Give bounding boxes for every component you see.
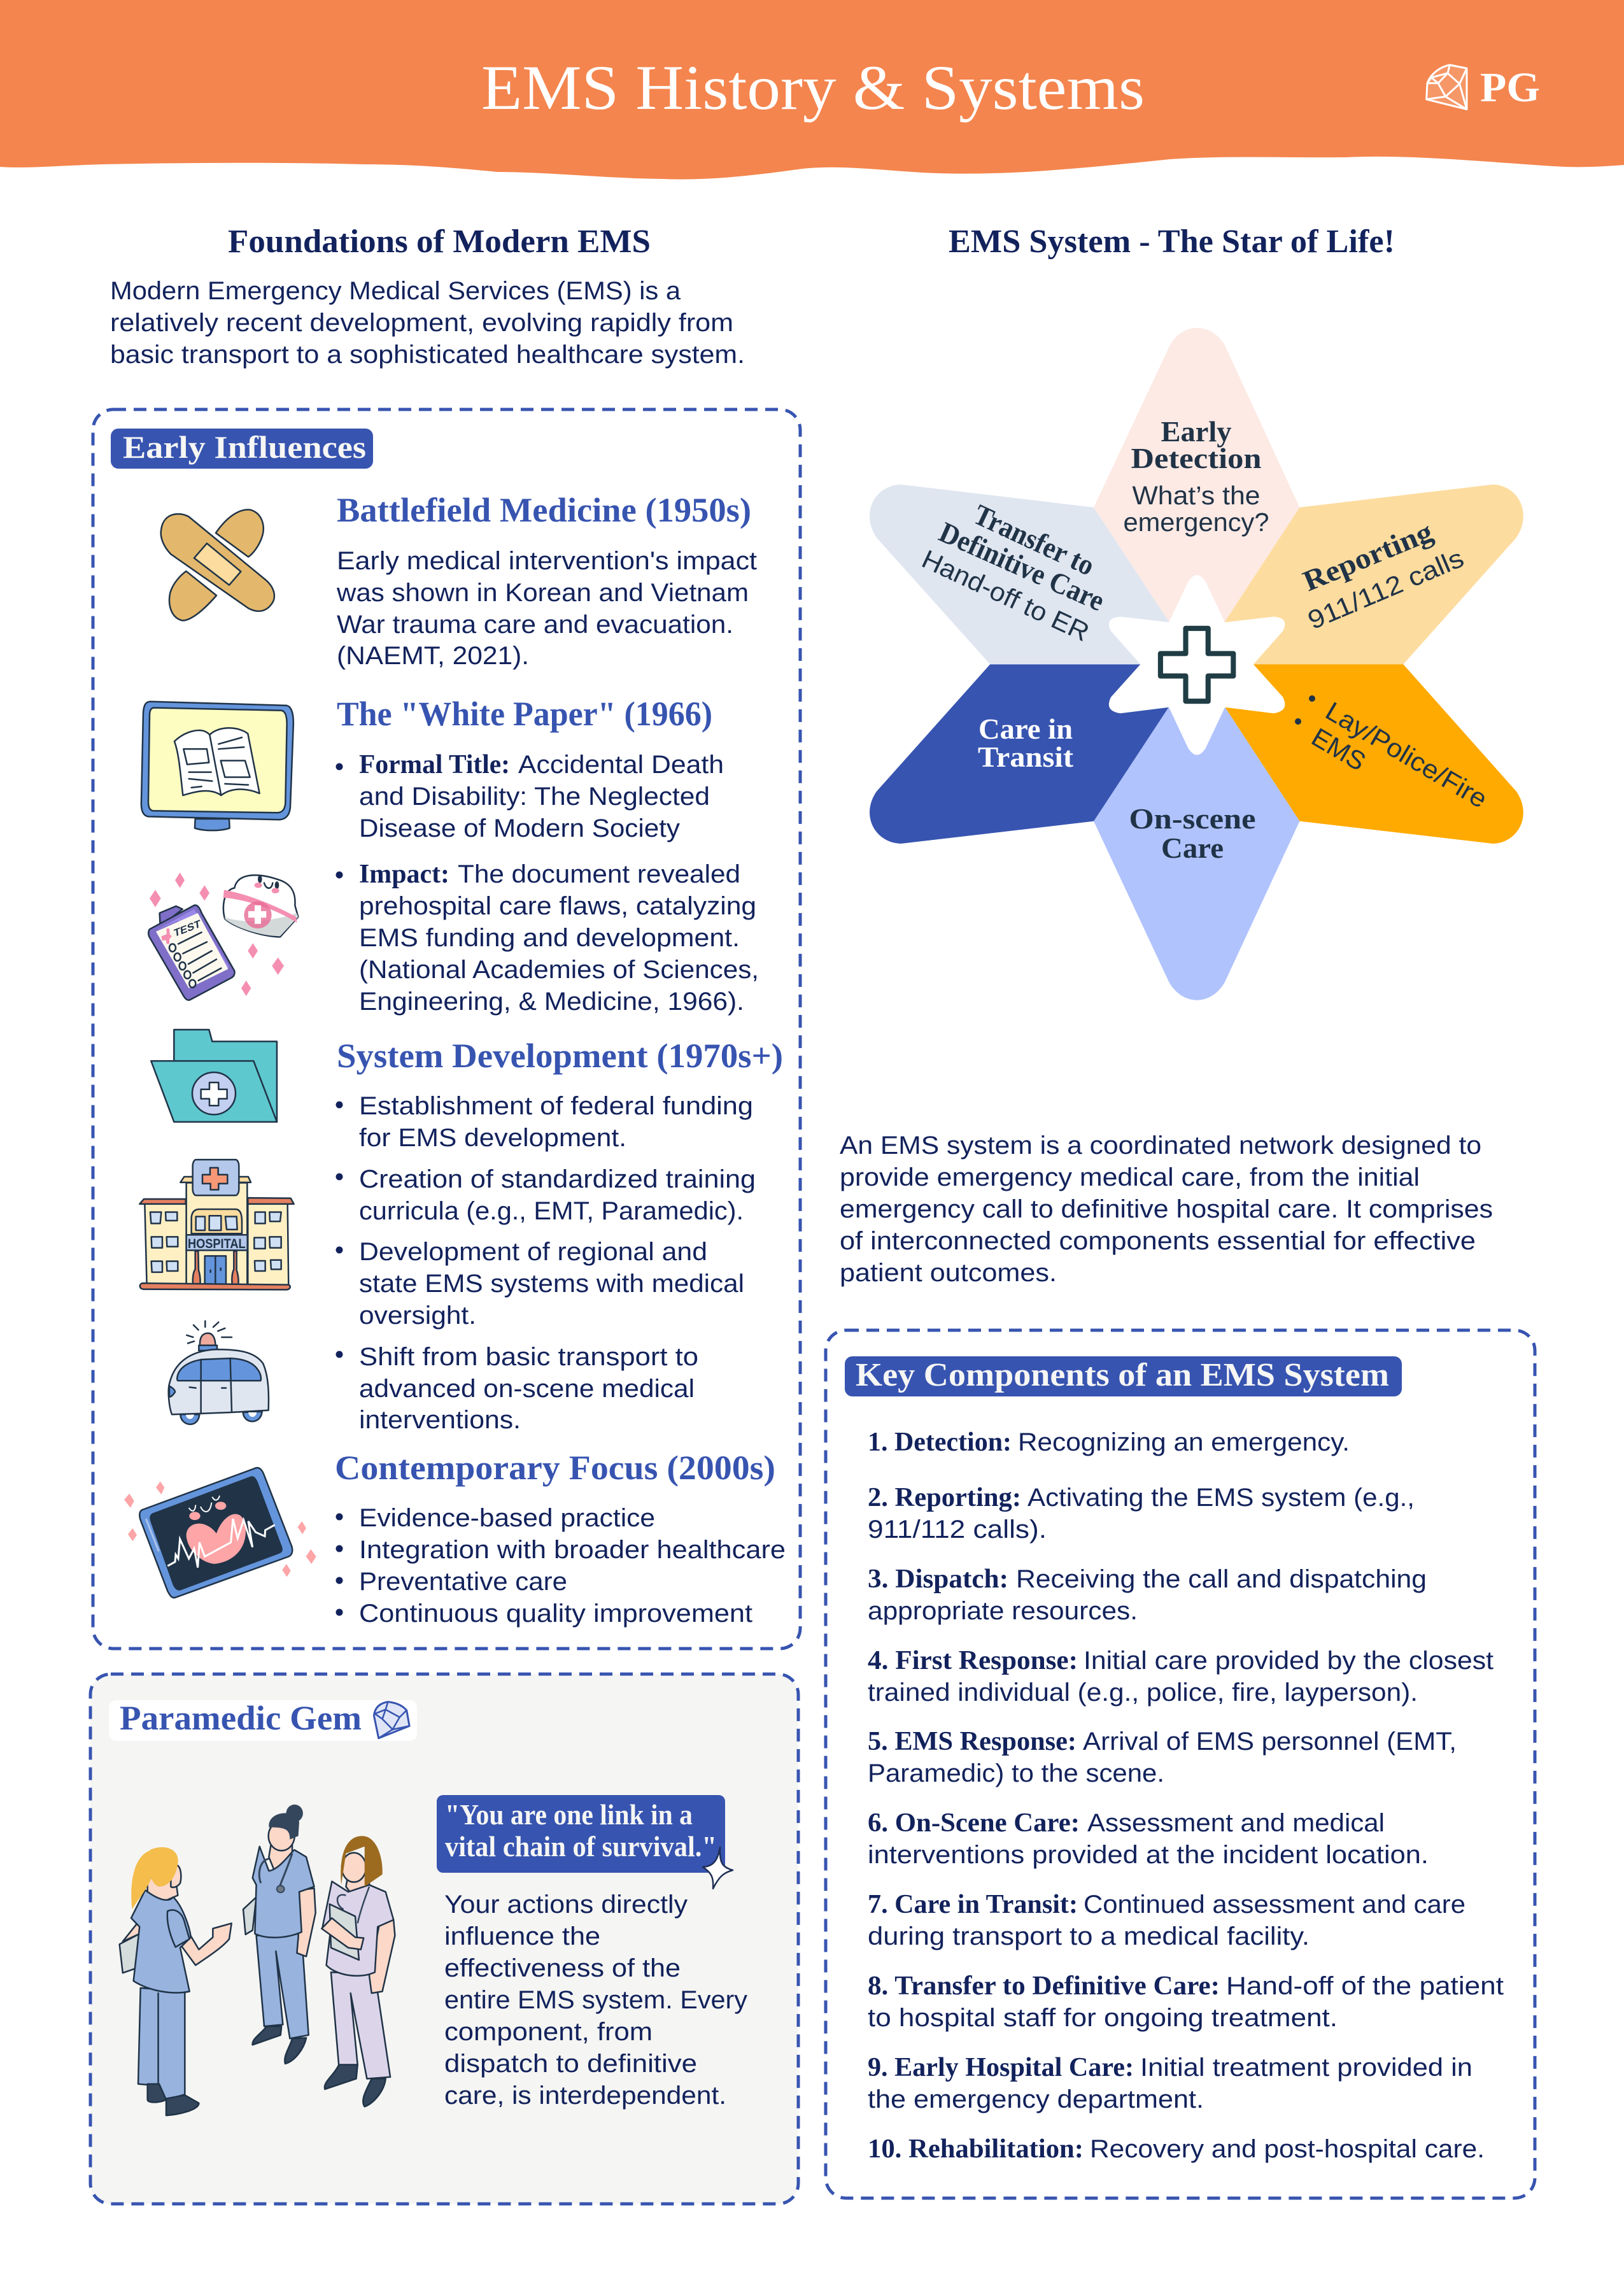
diagram: star of life <box>870 328 1523 1000</box>
text block: gem message: Your actions directly <box>444 1891 688 1919</box>
section: The White Paper: Formal Title: <box>359 750 510 779</box>
icon: tablet with heart <box>124 1468 316 1598</box>
icon: ambulance <box>169 1321 269 1424</box>
section: The White Paper: The document revealed <box>458 860 740 888</box>
icon: clipboard and nurse cap <box>148 872 298 1000</box>
list item 9: 9. Early Hospital Care: <box>868 2053 1134 2082</box>
list item 10: 10. Rehabilitation: <box>868 2134 1084 2164</box>
section: The White Paper: Impact: <box>359 860 449 889</box>
heading: Foundations of Modern EMS: Foundations of Modern EMS <box>228 224 651 260</box>
header banner <box>0 0 1624 180</box>
star centre <box>1109 575 1285 755</box>
section: Battlefield Medicine <box>336 491 757 670</box>
section: System Development: advanced on-scene medical <box>359 1375 695 1403</box>
section: The White Paper: Disease of Modern Society <box>359 814 680 842</box>
section: The White Paper: (National Academies of Sciences, <box>359 956 759 984</box>
text block: gem message: influence the <box>444 1922 600 1950</box>
petal: transfer to definitive care <box>870 485 1197 664</box>
section: Contemporary Focus: Integration with broader healthcare <box>359 1536 786 1564</box>
intro text: Modern Emergency Medical Services (EMS) is a <box>110 277 681 305</box>
section: The White Paper: prehospital care flaws, catalyzing <box>359 892 756 920</box>
text block: gem message: entire EMS system. Every <box>444 1986 747 2014</box>
label: Early Detection: emergency? <box>1123 508 1269 537</box>
label: Care in Transit <box>978 713 1074 773</box>
list item 6: 6. On-Scene Care: <box>868 1808 1080 1838</box>
section: System Development <box>336 1037 783 1434</box>
section: Battlefield Medicine: Early medical intervention's impact <box>337 547 757 575</box>
list item 5: Arrival of EMS personnel (EMT, <box>1083 1728 1457 1756</box>
section: The White Paper: EMS funding and development. <box>359 924 740 952</box>
section: Contemporary Focus: Contemporary Focus (2000s) <box>335 1449 775 1487</box>
label: Early Detection <box>1123 415 1269 537</box>
list item 2: 2. Reporting: <box>868 1483 1021 1512</box>
list item 3: appropriate resources. <box>868 1597 1138 1625</box>
icon: cross <box>1161 628 1233 701</box>
list item 8 <box>868 1971 1504 2032</box>
list item 7: during transport to a medical facility. <box>868 1922 1310 1950</box>
text block: EMS system description: An EMS system is a coordinated network designed to <box>840 1132 1481 1160</box>
figure: nurse with brown hair <box>321 1836 395 2106</box>
list item 6: interventions provided at the incident location. <box>868 1841 1429 1869</box>
list item 2: 911/112 calls). <box>868 1516 1047 1544</box>
logo: gem and PG <box>1427 64 1540 111</box>
icon: bandage <box>161 509 274 621</box>
section: Contemporary Focus: Evidence-based practice <box>359 1504 655 1532</box>
callout: quote <box>437 1795 725 1873</box>
callout: quote: "You are one link in a <box>445 1798 693 1831</box>
petal: care in transit <box>870 664 1197 844</box>
section: System Development: oversight. <box>359 1302 476 1330</box>
list item 5 <box>868 1727 1457 1787</box>
list item 4: Initial care provided by the closest <box>1084 1647 1493 1675</box>
tag: Early Influences: Early Influences <box>123 429 366 465</box>
list item 7: Continued assessment and care <box>1084 1891 1465 1919</box>
list item 1: 1. Detection: <box>868 1428 1012 1457</box>
list item 1: Recognizing an emergency. <box>1018 1428 1350 1456</box>
list item 6: Assessment and medical <box>1087 1809 1385 1837</box>
panel: Paramedic Gem <box>90 1674 798 2204</box>
section: Battlefield Medicine: War trauma care and evacuation. <box>337 611 733 639</box>
label: Reporting <box>1298 515 1468 635</box>
label: On-scene Care <box>1129 802 1255 864</box>
list item 8: 8. Transfer to Definitive Care: <box>868 1971 1220 2001</box>
section: System Development: state EMS systems with medical <box>359 1270 744 1298</box>
list item 10: Recovery and post-hospital care. <box>1090 2135 1485 2163</box>
list item 4: trained individual (e.g., police, fire, layperson). <box>868 1679 1418 1707</box>
section: System Development: Establishment of federal funding <box>359 1092 753 1120</box>
list item 8: Hand-off of the patient <box>1226 1972 1504 2000</box>
label: Lay Police Fire EMS: Lay/Police/Fire <box>1320 696 1492 814</box>
list item 1 <box>868 1428 1350 1457</box>
panel: Early Influences <box>93 409 800 1649</box>
icon: hospital: HOSPITAL <box>188 1235 246 1251</box>
heading: EMS System - The Star of Life: EMS System - The Star of Life! <box>949 224 1395 260</box>
callout: quote: vital chain of survival." <box>445 1830 717 1863</box>
icon: clipboard and nurse cap: TEST <box>173 918 202 939</box>
list item 2: Activating the EMS system (e.g., <box>1027 1484 1415 1512</box>
list item 10 <box>868 2134 1485 2164</box>
title: EMS History & Systems <box>481 52 1145 123</box>
text block: gem message: effectiveness of the <box>444 1954 681 1982</box>
section: Contemporary Focus: Continuous quality improvement <box>359 1600 752 1628</box>
text block: EMS system description: of interconnected components essential for effective <box>840 1227 1476 1255</box>
section: The White Paper: The "White Paper" (1966) <box>337 695 712 733</box>
label: Transfer to Definitive Care <box>917 498 1110 647</box>
figure: nurse with blonde ponytail <box>120 1847 232 2115</box>
list item 5: 5. EMS Response: <box>868 1727 1077 1756</box>
label: Care in Transit: Care in <box>978 713 1073 745</box>
list item 9: Initial treatment provided in <box>1140 2054 1472 2082</box>
list item 3 <box>868 1565 1427 1625</box>
section: The White Paper: Accidental Death <box>518 751 724 779</box>
label: On-scene Care: Care <box>1161 832 1224 864</box>
petal: lay police fire <box>1197 664 1523 844</box>
section: Battlefield Medicine: Battlefield Medicine (1950s) <box>337 491 751 529</box>
list item 3: Receiving the call and dispatching <box>1016 1565 1427 1593</box>
list item 7 <box>868 1890 1465 1950</box>
intro text: relatively recent development, evolving rapidly from <box>110 309 733 337</box>
list item 4 <box>868 1646 1493 1707</box>
list item 3: 3. Dispatch: <box>868 1565 1008 1594</box>
section: The White Paper: and Disability: The Neglected <box>359 783 710 811</box>
tag: Paramedic Gem: Paramedic Gem <box>120 1699 362 1737</box>
icon: monitor with book <box>141 702 293 830</box>
panel: Key Components <box>826 1330 1535 2198</box>
label: Early Detection: Early <box>1161 415 1231 448</box>
label: Transfer to Definitive Care: Transfer to <box>969 498 1099 582</box>
petal: on-scene care <box>1094 664 1299 1000</box>
text block: EMS system description: provide emergency medical care, from the initial <box>840 1163 1420 1191</box>
label: On-scene Care: On-scene <box>1129 802 1255 835</box>
petal: early detection <box>1094 328 1299 664</box>
label: Reporting: Reporting <box>1298 515 1437 597</box>
label: Care in Transit: Transit <box>978 741 1074 773</box>
list item 2 <box>868 1483 1415 1544</box>
text block: EMS system description: patient outcomes. <box>840 1259 1057 1287</box>
list item 5: Paramedic) to the scene. <box>868 1759 1164 1787</box>
section: System Development: curricula (e.g., EMT, Paramedic). <box>359 1197 744 1225</box>
intro text <box>110 277 745 369</box>
label: Early Detection: Detection <box>1131 442 1262 474</box>
section: Battlefield Medicine: (NAEMT, 2021). <box>337 642 529 670</box>
illustration: three medical staff <box>120 1805 395 2115</box>
section: Contemporary Focus: Preventative care <box>359 1568 567 1596</box>
section: System Development: for EMS development. <box>359 1124 626 1152</box>
icon: medical folder <box>151 1030 277 1122</box>
tag: Key Components of an EMS System: Key Components of an EMS System <box>856 1357 1389 1393</box>
logo: gem and PG: PG <box>1480 64 1540 111</box>
text block: gem message <box>444 1891 747 2110</box>
section: System Development: Creation of standardized training <box>359 1165 756 1193</box>
icon: sparkle <box>703 1847 733 1889</box>
label: Lay Police Fire EMS: EMS <box>1306 722 1371 776</box>
label: Transfer to Definitive Care: Hand-off to ER <box>917 544 1094 647</box>
figure: nurse with dark bun <box>243 1805 316 2064</box>
label: Reporting: 911/112 calls <box>1304 543 1468 635</box>
intro text: basic transport to a sophisticated healthcare system. <box>110 341 745 369</box>
section: System Development: System Development (1970s+) <box>337 1037 783 1075</box>
list item 9: the emergency department. <box>868 2085 1204 2113</box>
label: Early Detection: What’s the <box>1132 481 1260 510</box>
text block: gem message: component, from <box>444 2018 653 2046</box>
text block: EMS system description <box>840 1132 1493 1287</box>
section: System Development: Development of regional and <box>359 1238 707 1266</box>
icon: gem <box>374 1702 409 1738</box>
list item 7: 7. Care in Transit: <box>868 1890 1078 1919</box>
petal: reporting <box>1197 485 1523 664</box>
list item 9 <box>868 2053 1472 2113</box>
list item 4: 4. First Response: <box>868 1646 1078 1675</box>
label: Transfer to Definitive Care: Definitive Care <box>935 516 1110 617</box>
text block: gem message: care, is interdependent. <box>444 2082 726 2110</box>
section: System Development: Shift from basic transport to <box>359 1343 698 1371</box>
section: The White Paper <box>336 695 759 1016</box>
section: Battlefield Medicine: was shown in Korean and Vietnam <box>336 579 749 607</box>
icon: hospital <box>139 1160 294 1289</box>
text block: EMS system description: emergency call to definitive hospital care. It comprises <box>840 1195 1493 1223</box>
section: System Development: interventions. <box>359 1406 521 1434</box>
list item 8: to hospital staff for ongoing treatment. <box>868 2004 1338 2032</box>
section: Contemporary Focus <box>335 1449 786 1628</box>
section: The White Paper: Engineering, & Medicine, 1966). <box>359 988 744 1016</box>
text block: gem message: dispatch to definitive <box>444 2050 697 2078</box>
list item 6 <box>868 1808 1429 1869</box>
